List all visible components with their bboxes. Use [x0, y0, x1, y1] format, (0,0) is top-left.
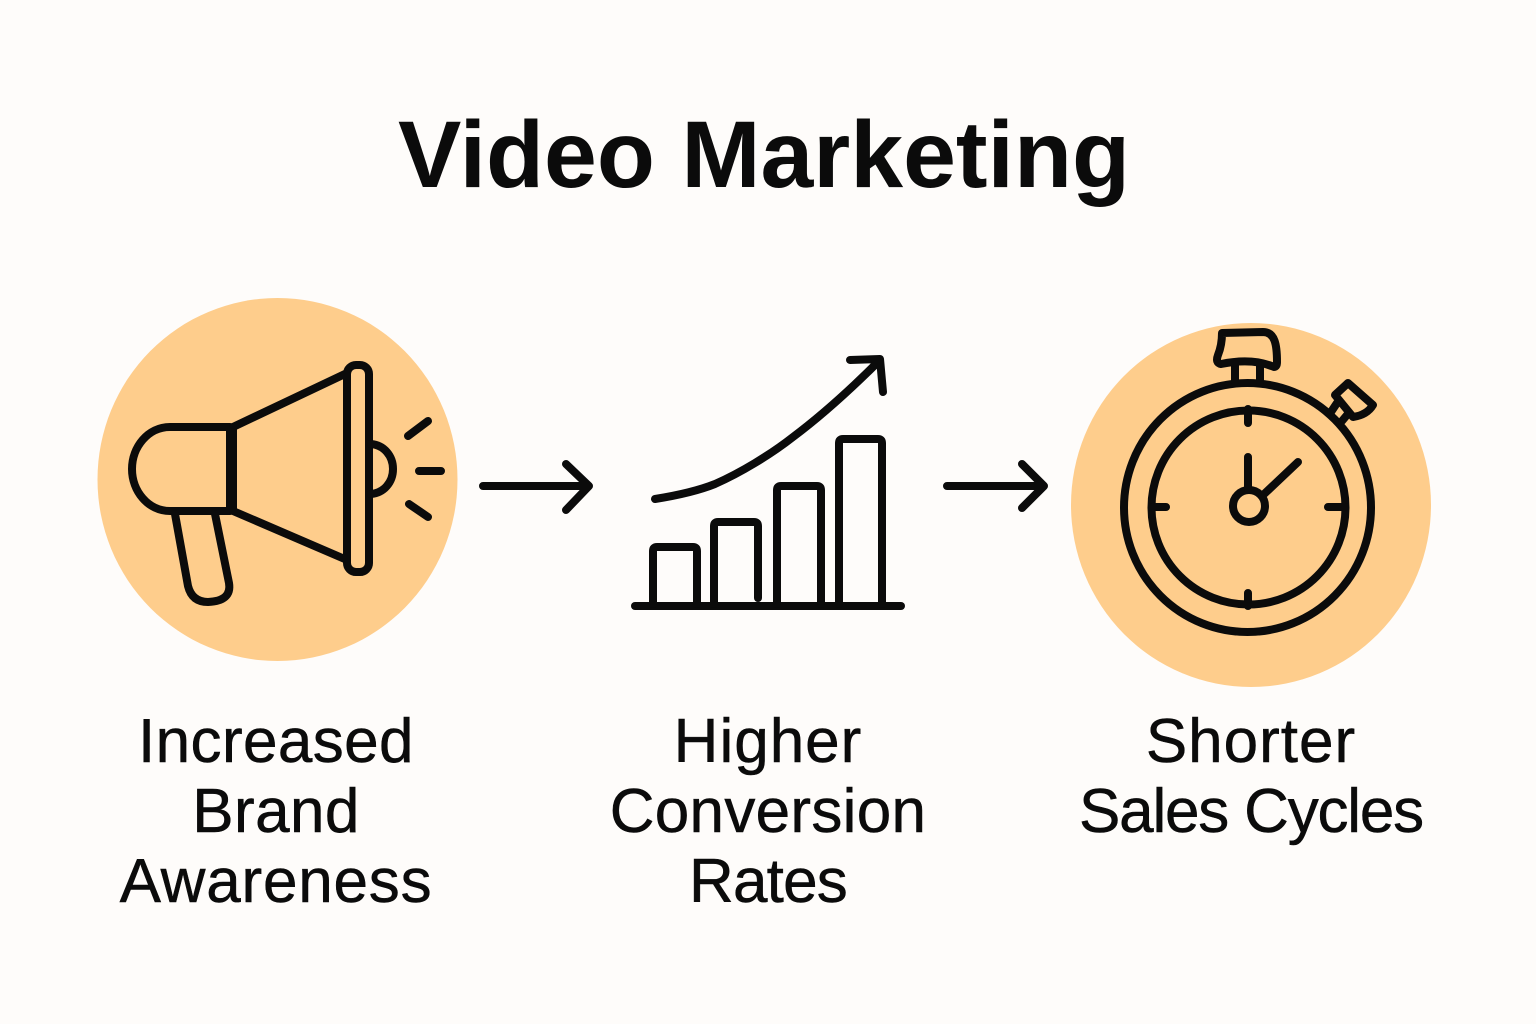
label: brand awareness: Increased [138, 707, 414, 776]
label: sales cycles: Shorter [1146, 707, 1356, 776]
icon: megaphone [98, 298, 458, 661]
label: sales cycles [1079, 707, 1423, 846]
icon: bar chart [635, 359, 901, 606]
title: Video Marketing [398, 102, 1130, 208]
label: brand awareness [119, 707, 432, 916]
label: conversion rates: Higher [674, 707, 862, 776]
label: sales cycles: Sales Cycles [1079, 777, 1423, 846]
label: conversion rates: Conversion [610, 777, 926, 846]
label: brand awareness: Brand [192, 777, 360, 846]
label: conversion rates: Rates [689, 847, 847, 916]
label: brand awareness: Awareness [120, 847, 432, 916]
label: conversion rates [610, 707, 926, 916]
icon: stopwatch [1071, 323, 1431, 687]
arrow: first [483, 464, 589, 510]
arrow: second [947, 464, 1044, 508]
